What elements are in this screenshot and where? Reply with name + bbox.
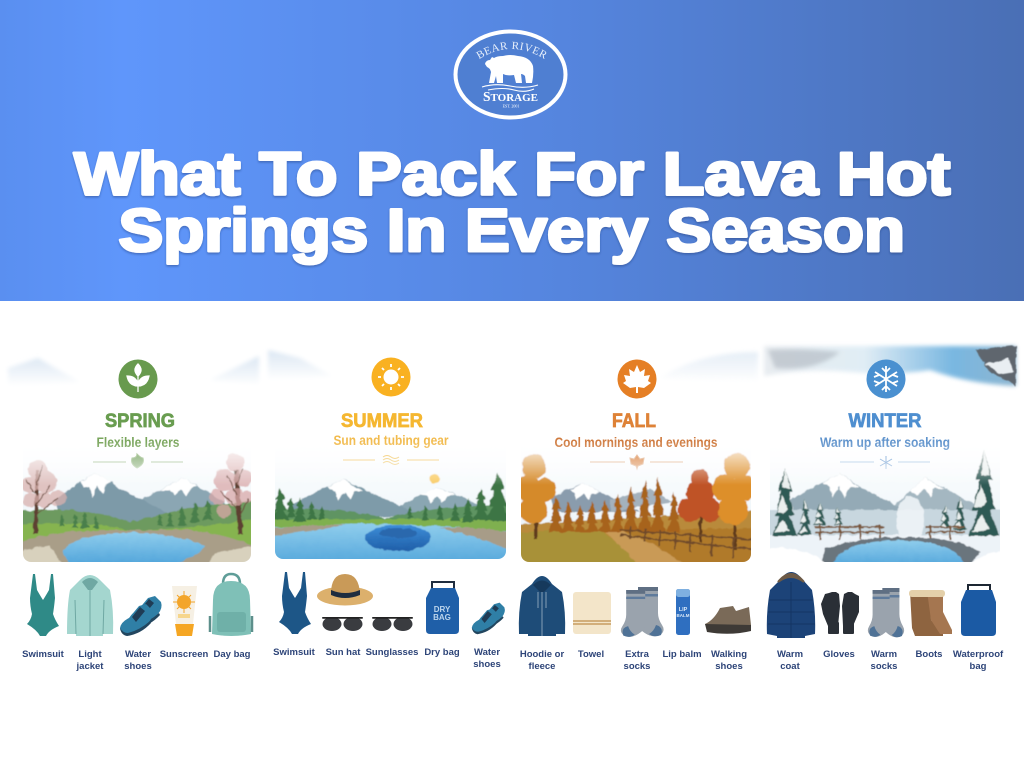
fall item labels: Towel (578, 649, 604, 660)
item: water shoes summer (472, 603, 505, 634)
item: dry bag: DRY (434, 605, 451, 614)
summer item labels: Dry bag (424, 647, 460, 658)
fall item labels: Extra (625, 649, 650, 660)
summer item labels: Water (474, 647, 500, 658)
summer subtitle: Sun and tubing gear (334, 433, 449, 448)
fall haze (660, 352, 758, 382)
panel: winter (762, 346, 1016, 672)
winter item labels: Boots (916, 649, 942, 660)
winter item labels: Waterproof (953, 649, 1004, 660)
winter item labels: bag (970, 661, 987, 672)
item: warm socks (868, 588, 904, 637)
item: lip balm: BALM (676, 613, 690, 618)
item: winter coat (767, 572, 815, 638)
winter item labels: Gloves (823, 649, 855, 660)
item: towel (573, 592, 611, 634)
wooden bridges (815, 525, 965, 540)
header banner (0, 0, 1024, 301)
spring item labels: jacket (76, 661, 104, 672)
spring divider (93, 454, 183, 468)
winter item labels: coat (780, 661, 801, 672)
fall item labels: Walking (711, 649, 747, 660)
panel: summer (267, 350, 514, 670)
summer haze mountains (268, 350, 332, 380)
item: dry bag (426, 582, 459, 634)
wooden fence (620, 526, 759, 558)
item: sunglasses (322, 617, 363, 631)
spring item labels: shoes (124, 661, 152, 672)
item: gloves (821, 592, 859, 634)
spring haze mountains (8, 356, 259, 386)
item: sun hat (317, 574, 373, 606)
item: lip balm (676, 589, 690, 635)
winter item labels (777, 649, 1004, 672)
item: water shoes (120, 596, 162, 636)
summer item labels: Sunglasses (366, 647, 418, 658)
winter item labels: Warm (871, 649, 897, 660)
fall item labels: fleece (529, 661, 555, 672)
spring heading: SPRING (105, 411, 175, 432)
winter divider (840, 456, 930, 469)
panel: spring (8, 356, 259, 672)
winter subtitle: Warm up after soaking (820, 435, 950, 450)
fall item labels (520, 649, 747, 672)
fall subtitle: Cool mornings and evenings (554, 435, 718, 450)
icon: sun badge (372, 358, 410, 396)
panel: fall (513, 352, 759, 672)
fall item labels: Lip balm (662, 649, 702, 660)
winter heading: WINTER (848, 411, 922, 432)
item: sunscreen (172, 586, 197, 636)
right golden tree (712, 452, 751, 550)
fall landscape (521, 442, 751, 562)
item: extra socks (621, 587, 664, 637)
winter item labels: socks (871, 661, 897, 672)
logo: Bear River Storage (454, 30, 568, 120)
right blossom tree (210, 453, 253, 534)
item: walking shoes (705, 606, 751, 634)
summer heading: SUMMER (341, 411, 423, 432)
winter landscape (770, 442, 1000, 562)
icon: maple leaf badge (618, 360, 656, 398)
spring landscape (23, 442, 251, 562)
summer divider (343, 456, 439, 464)
item: boots (909, 590, 952, 636)
spring item labels: Day bag (214, 649, 251, 660)
fall heading: FALL (612, 411, 656, 432)
fall divider (590, 455, 683, 469)
item: hoodie (519, 576, 565, 636)
steam (896, 495, 924, 536)
fall item labels: shoes (715, 661, 743, 672)
item: dry bag: BAG (433, 613, 451, 622)
title: Springs In Every Season (118, 197, 905, 264)
summer item labels: Sun hat (326, 647, 361, 658)
red maple (678, 469, 722, 542)
summer item labels (273, 647, 501, 670)
fall item labels: socks (624, 661, 650, 672)
spring item labels: Swimsuit (22, 649, 65, 660)
logo: Bear River Storage: EST. 2001 (503, 104, 519, 108)
left golden tree (521, 454, 556, 540)
summer item labels: Swimsuit (273, 647, 316, 658)
title: What To Pack For Lava Hot (74, 140, 950, 208)
summer item labels: shoes (473, 659, 501, 670)
winter top band (764, 346, 1016, 386)
item: lip balm: LIP (679, 607, 688, 613)
fall item labels: Hoodie or (520, 649, 564, 660)
inner tube (365, 525, 431, 551)
title (74, 140, 950, 264)
logo: Bear River Storage: STORAGE (483, 89, 538, 104)
item: swimsuit (27, 574, 59, 636)
summer landscape (275, 442, 506, 559)
item: day bag (210, 574, 252, 636)
item: light jacket (67, 575, 113, 636)
icon: spring leaf badge (118, 360, 158, 398)
spring item labels: Sunscreen (160, 649, 208, 660)
spring subtitle: Flexible layers (96, 435, 180, 450)
item: navy swimsuit (279, 572, 311, 634)
logo: Bear River Storage: BEAR RIVER (476, 42, 546, 60)
item: waterproof bag (961, 585, 996, 636)
icon: snowflake badge (866, 360, 906, 398)
spring item labels: Light (78, 649, 102, 660)
spring item labels (22, 649, 251, 672)
spring item labels: Water (125, 649, 151, 660)
item: sunglasses pair (372, 617, 413, 631)
left blossom tree (22, 460, 66, 534)
winter item labels: Warm (777, 649, 803, 660)
